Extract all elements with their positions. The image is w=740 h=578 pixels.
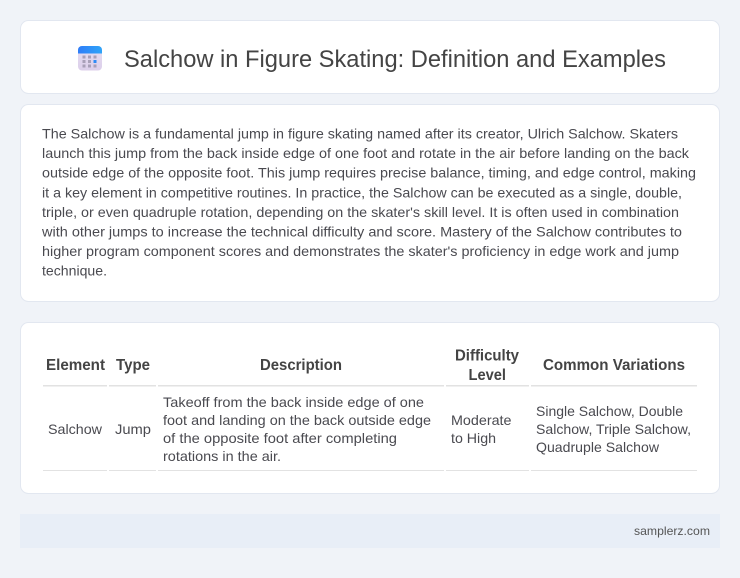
panel: description card [20, 104, 720, 302]
table header row: Common Variations [543, 357, 685, 374]
text block: description paragraph [41, 126, 696, 279]
table header row: Description [260, 357, 342, 374]
table data row: Moderate [451, 412, 512, 428]
icon: calendar [78, 46, 102, 70]
panel: title card [20, 20, 720, 94]
text block: description paragraph: higher program component scores and demonstrates the skater's proficiency in edge work and jump [42, 243, 679, 259]
table data row: Quadruple Salchow [536, 439, 660, 455]
text block: description paragraph: technique. [42, 263, 107, 279]
table data row [48, 394, 691, 464]
table data row: rotations in the air. [163, 448, 281, 464]
text block: description paragraph: it a key element in competitive routines. In practice, the Salchow can be executed as a single, double, [42, 184, 682, 200]
table data row: Salchow, Triple Salchow, [536, 421, 691, 437]
table data row: foot and landing on the back outside edge [163, 412, 431, 428]
table header row: Difficulty [455, 348, 519, 364]
table header row: Level [468, 367, 506, 384]
text block: description paragraph: outside edge of the opposite foot. This jump requires precise balance, timing, and edge control, making [42, 165, 696, 181]
table header row: Type [116, 357, 150, 374]
panel: table card [20, 322, 720, 494]
text block: description paragraph: triple, or even quadruple rotation, depending on the skater's skill level. It is often used in combination [42, 204, 679, 220]
footer text: samplerz.com [634, 524, 710, 538]
table header row: Element [46, 357, 106, 374]
title: Salchow in Figure Skating: Definition and Examples [124, 46, 666, 73]
table data row: Jump [115, 421, 151, 437]
table header row [46, 348, 685, 384]
text block: description paragraph: The Salchow is a fundamental jump in figure skating named after its creator, Ulrich Salchow. Skaters [42, 126, 678, 142]
footer bar [20, 514, 720, 548]
table data row: Salchow [48, 421, 103, 437]
table data row: of the opposite foot after completing [163, 430, 397, 446]
text block: description paragraph: launch this jump from the back inside edge of one foot and rotate in the air before landing on the back [42, 145, 690, 161]
text block: description paragraph: with other jumps to increase the technical difficulty and score. Mastery of the Salchow contributes to [41, 224, 682, 240]
table data row: Takeoff from the back inside edge of one [163, 394, 424, 410]
table data row: to High [451, 430, 496, 446]
table data row: Single Salchow, Double [536, 403, 683, 419]
